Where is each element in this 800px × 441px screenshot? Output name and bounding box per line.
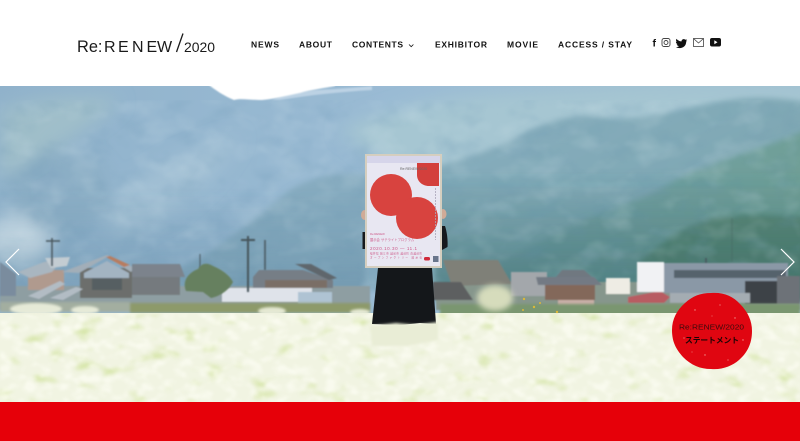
navigation menu: MOVIE bbox=[507, 40, 538, 50]
person: arms bbox=[362, 226, 448, 250]
sky notch above the ridge bbox=[205, 82, 372, 100]
navigation menu: ACCESS / STAY bbox=[558, 40, 632, 50]
person: hands bbox=[361, 209, 446, 220]
person: black skirt bbox=[372, 268, 436, 325]
poster text bbox=[370, 232, 422, 260]
field of white buckwheat flowers bbox=[0, 285, 800, 402]
right slider arrow bbox=[781, 249, 794, 275]
badge logo text: Re:RENEW/2020 bbox=[679, 322, 744, 332]
poster paper bbox=[367, 156, 440, 266]
icon: instagram bbox=[662, 38, 670, 46]
distant houses right bbox=[433, 260, 800, 310]
icon: twitter bbox=[676, 39, 687, 48]
red badge circle bbox=[672, 293, 752, 369]
social icons bbox=[652, 38, 721, 50]
icon: youtube bbox=[710, 38, 721, 46]
navigation menu: EXHIBITOR bbox=[435, 40, 487, 50]
poster text: 福井県 鯖江市 越前市 越前町 南越前町 bbox=[370, 252, 422, 256]
hero photograph: valley, houses and field bbox=[0, 82, 800, 402]
navigation menu bbox=[251, 40, 632, 50]
poster title: Re:RENEW/2020 bbox=[400, 167, 427, 171]
badge speckles bbox=[683, 304, 744, 361]
left hazy highlights bbox=[0, 97, 240, 264]
mountain base shading bbox=[0, 170, 800, 300]
distant houses left bbox=[0, 255, 370, 310]
icon: mail bbox=[694, 38, 704, 46]
header bar bbox=[0, 0, 800, 86]
person holding poster bbox=[361, 154, 448, 346]
far right ridge bbox=[340, 86, 800, 190]
utility poles bbox=[46, 218, 732, 294]
poster qr code bbox=[433, 256, 438, 262]
logo: Re:RENEW/2020: Re: bbox=[77, 37, 102, 56]
far mountain bbox=[0, 86, 800, 318]
poster red circles bbox=[370, 163, 439, 239]
right hill three bbox=[640, 214, 800, 300]
right hill two bbox=[500, 124, 800, 300]
logo: Re:RENEW/2020: RENEW bbox=[104, 39, 173, 56]
poster text: 展示会 サテライトプログラム bbox=[370, 237, 414, 242]
logo: Re:RENEW/2020 bbox=[77, 34, 215, 56]
poster red mark bbox=[424, 257, 430, 260]
right hill one bbox=[430, 98, 800, 300]
poster text: 2020.10.30 — 11.1 bbox=[370, 246, 417, 251]
flower clumps above field edge bbox=[10, 303, 370, 315]
hedges at field edge bbox=[0, 302, 800, 316]
navigation menu: CONTENTS bbox=[352, 40, 403, 50]
poster text: オープンファクトリー 展示会 bbox=[370, 256, 422, 260]
red footer band bbox=[0, 402, 800, 441]
poster vertical line of text bbox=[434, 188, 436, 240]
badge label: ステートメント bbox=[685, 336, 739, 345]
left slider arrow bbox=[6, 249, 19, 275]
poster frame bbox=[365, 154, 442, 268]
forest texture bbox=[0, 100, 800, 300]
statement badge bbox=[672, 293, 752, 369]
logo: Re:RENEW/2020: 2020 bbox=[184, 40, 215, 55]
navigation menu: NEWS bbox=[251, 40, 279, 50]
flowers over skirt bbox=[370, 322, 438, 346]
icon: facebook: f bbox=[652, 38, 656, 50]
poster text: Re:RENEW bbox=[370, 232, 385, 236]
tree bbox=[185, 264, 233, 298]
hill near poster bbox=[170, 174, 420, 290]
navigation menu: ABOUT bbox=[299, 40, 333, 50]
